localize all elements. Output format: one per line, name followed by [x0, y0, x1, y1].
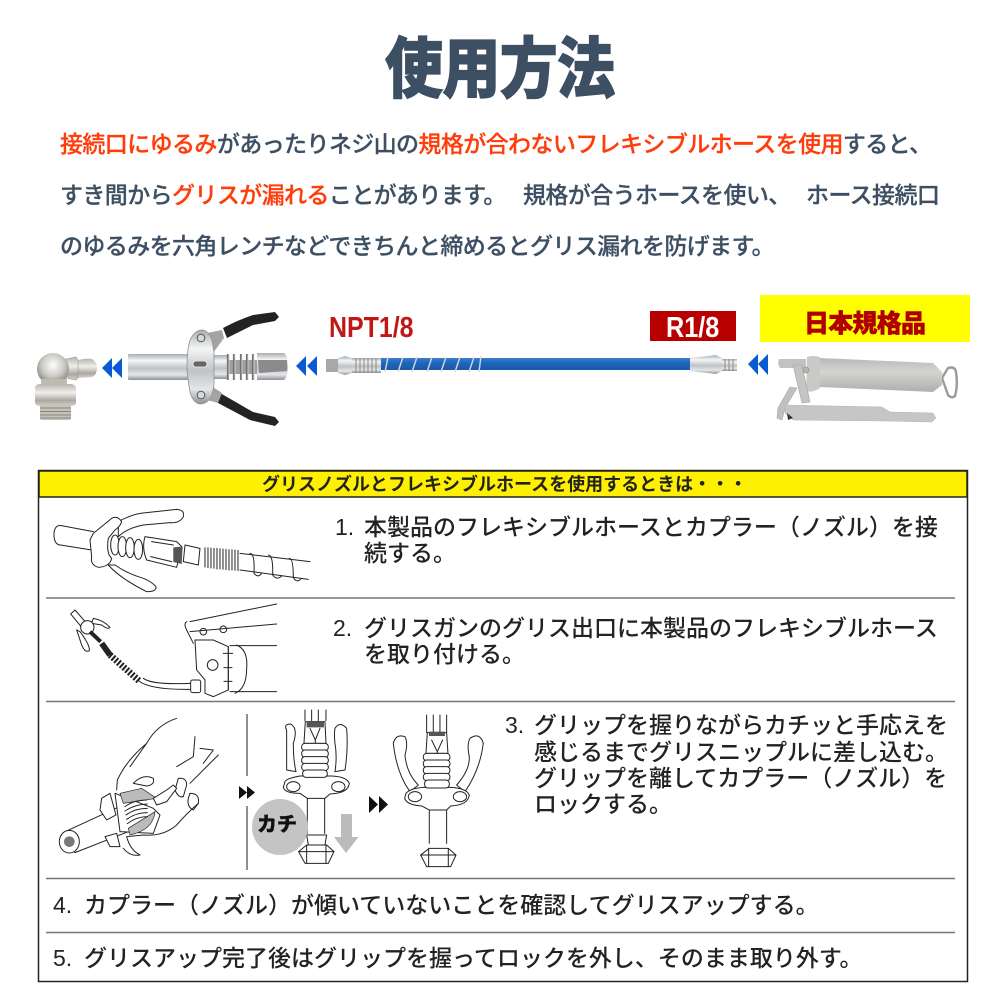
arrows: blue left double arrow 3 — [748, 354, 768, 375]
step 3 text: グリップを握りながらカチッと手応えを — [534, 712, 948, 738]
arrows: blue left double arrow 2 — [296, 356, 317, 376]
step 2 text: グリスガンのグリス出口に本製品のフレキシブルホース — [364, 615, 938, 641]
step 2 text: を取り付ける。 — [364, 641, 525, 667]
panel header: グリスノズルとフレキシブルホースを使用するときは・・・ — [262, 474, 747, 494]
step 2 text: 2. — [333, 615, 352, 641]
intro text block: ホース接続口 — [806, 182, 939, 208]
step 2 text — [333, 615, 938, 667]
photo: blue flexible hose — [326, 355, 737, 375]
photo: grease gun — [777, 356, 957, 422]
step 2 illustration — [71, 604, 277, 697]
icon: click speech bubble — [252, 799, 308, 855]
step 1 illustration — [54, 509, 310, 592]
step 4 text: 4. — [53, 892, 72, 918]
icon: click speech bubble: カチ — [257, 813, 297, 836]
step 1 text — [335, 514, 938, 566]
icon: fast-forward arrow 1 — [239, 786, 255, 799]
intro text block: 接続口にゆるみがあったりネジ山の規格が合わないフレキシブルホースを使用すると、 — [60, 131, 932, 157]
step 4 text: カプラー（ノズル）が傾いていないことを確認してグリスアップする。 — [84, 892, 819, 918]
intro text block: すき間からグリスが漏れることがあります。 — [60, 182, 506, 208]
panel header — [39, 471, 967, 497]
label: Japanese standard: 日本規格品 — [804, 310, 926, 338]
intro text block — [60, 131, 939, 259]
step 3 text — [505, 712, 948, 817]
photo: grease coupler — [128, 312, 288, 426]
title: 使用方法 — [385, 34, 615, 107]
step 1 text: 本製品のフレキシブルホースとカプラー（ノズル）を接 — [364, 514, 938, 540]
step 3 text: 3. — [505, 712, 524, 738]
label: R1/8: R1/8 — [666, 310, 719, 343]
how-to panel — [38, 470, 968, 982]
intro text block: 規格が合うホースを使い、 — [523, 182, 791, 208]
label: Japanese standard — [760, 295, 970, 342]
step 3 text: グリップを離してカプラー（ノズル）を — [534, 765, 947, 791]
step 1 text: 1. — [335, 514, 354, 540]
step 3 illustration: hand on coupler — [59, 718, 218, 855]
step 3 text: 感じるまでグリスニップルに差し込む。 — [534, 739, 948, 765]
step 5 text: 5. — [53, 945, 72, 971]
label: NPT1/8: NPT1/8 — [329, 311, 414, 343]
label: R1/8 — [650, 310, 736, 343]
step 3 illustration: coupler before click — [283, 710, 349, 863]
step 5 text: グリスアップ完了後はグリップを握ってロックを外し、そのまま取り外す。 — [84, 945, 863, 971]
step 3 text: ロックする。 — [534, 791, 672, 817]
photo: elbow grease nipple — [35, 353, 97, 420]
arrows: blue left double arrow 1 — [102, 358, 122, 378]
step 1 text: 続する。 — [364, 540, 456, 566]
step 3 illustration: coupler after click — [393, 715, 483, 867]
intro text block: のゆるみを六角レンチなどできちんと締めるとグリス漏れを防げます。 — [60, 233, 774, 259]
divider with arrows and click bubble — [239, 714, 358, 870]
icon: fast-forward arrow 2 — [369, 796, 388, 813]
icon: grey down arrow — [334, 814, 358, 853]
